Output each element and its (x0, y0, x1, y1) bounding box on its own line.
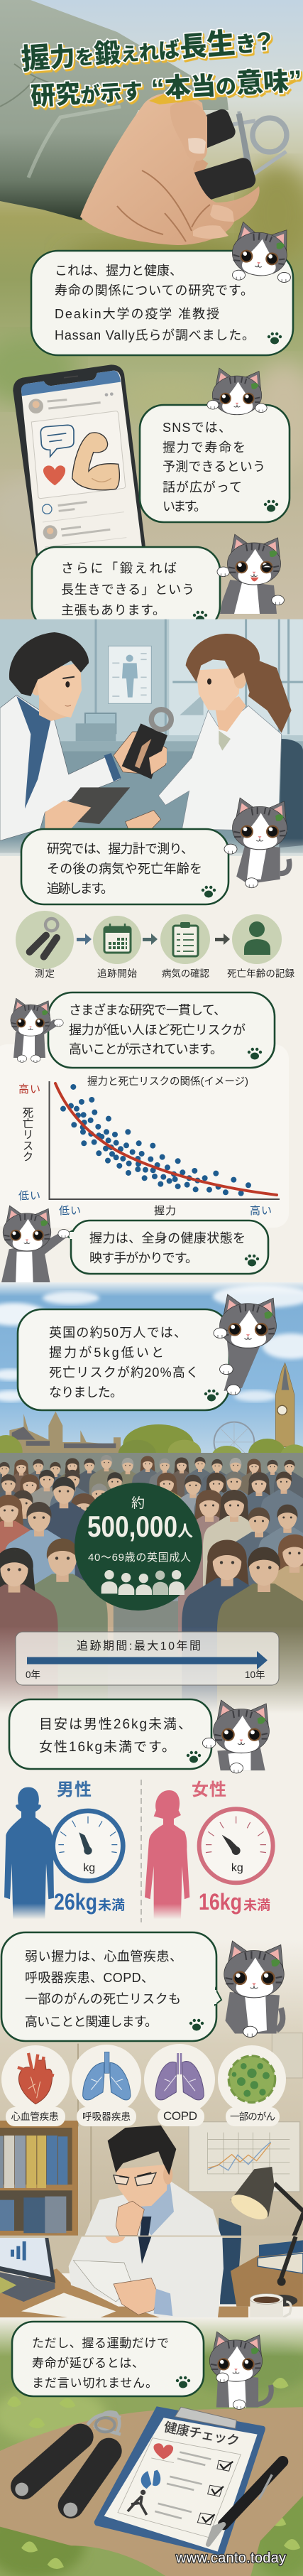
icon: paw (187, 1751, 201, 1763)
chart title: 握力と死亡リスクの関係(イメージ) (87, 1076, 248, 1088)
text block: 追跡します。 (47, 882, 114, 896)
text block: 高いことが示されています。 (69, 1042, 223, 1056)
panel: cream comparison section (0, 1714, 303, 1984)
text block: 映す手がかりです。 (89, 1251, 198, 1265)
badge: respiratory disease: 呼吸器疾患 (82, 2111, 131, 2122)
illustration: thinking male researcher at desk (0, 2126, 303, 2328)
callout: SNS claim (140, 405, 290, 522)
badge: respiratory disease (72, 2045, 141, 2126)
step: measurement (16, 911, 74, 979)
text: adults aged 40 to 69: 40〜69歳の英国成人 (88, 1551, 191, 1564)
text block: ただし、握る運動だけで (32, 2337, 169, 2350)
callout: thresholds (9, 1699, 211, 1769)
text block (39, 1716, 192, 1755)
icon: paw (202, 886, 216, 898)
value suffix: 未満 (243, 1898, 270, 1913)
icon: paw (248, 1048, 262, 1060)
icon: gauge showing under 16kg: kg (231, 1862, 243, 1874)
value: 26kg or less: 26kg (54, 1889, 97, 1915)
x axis labels: 握力 (154, 1205, 176, 1217)
text block: 目安は男性26kg未満、 (39, 1716, 192, 1732)
stat: 500,000 people: 500,000 (87, 1510, 177, 1543)
icon: female silhouette (145, 1790, 189, 1920)
trend curve (55, 1083, 277, 1195)
text block: 握力で寿命を (162, 440, 246, 455)
icon: gauge showing under 16kg (199, 1809, 273, 1883)
text block (162, 421, 265, 514)
title line 2: 研究が示す “本当の意味” (30, 65, 303, 112)
text block: その後の病気や死亡年齢を (47, 862, 202, 876)
title (20, 25, 303, 112)
text block (32, 2337, 169, 2390)
website credit: www.canto.today (175, 2550, 286, 2566)
badge: about 500,000 UK adults (75, 1483, 202, 1611)
text block: Hassan Vally氏らが調べました。 (55, 328, 255, 342)
badge: cardiovascular disease (1, 2045, 70, 2126)
icon: paw (176, 2376, 190, 2388)
icon: sad sitting cat (224, 1941, 284, 2037)
y axis labels (18, 1083, 40, 1202)
text block: さまざまな研究で一貫して、 (69, 1002, 226, 1017)
step: disease check (160, 914, 210, 979)
arrow (77, 933, 92, 945)
text block (49, 1326, 199, 1400)
callout: whole body health indicator (65, 1221, 268, 1274)
icon: waving cat (217, 534, 284, 614)
step: age at death record: 死亡年齢の記録 (227, 968, 295, 979)
chart: grip strength vs mortality risk scatter (18, 1076, 280, 1217)
timeline heading: 追跡期間:最大10年間 (77, 1640, 201, 1652)
text block: 一部のがんの死亡リスクも (25, 1992, 181, 2006)
text block: 予測できるという (162, 460, 265, 474)
text block: 弱い握力は、心血管疾患、 (25, 1949, 182, 1964)
text block: 女性16kg未満です。 (39, 1739, 175, 1755)
text block: 長生きできる」という (61, 583, 194, 597)
badge: some cancers: 一部のがん (230, 2111, 275, 2122)
x axis labels: 高い (250, 1205, 272, 1217)
badge: COPD (144, 2044, 215, 2126)
icon: male silhouette (4, 1787, 54, 1920)
badge: COPD: COPD (163, 2109, 197, 2123)
icon: paw (245, 1255, 259, 1266)
icon: sitting cat (224, 798, 290, 888)
timeline: follow-up period up to 10 years (16, 1632, 279, 1685)
illustration: jacket sleeve (0, 0, 228, 220)
illustration: clipboard health checklist (94, 2406, 265, 2556)
arrow (215, 933, 230, 945)
illustration: crowd of people (0, 1455, 303, 1705)
illustration: female researcher (126, 634, 292, 834)
text block: 話が広がって (162, 480, 242, 494)
icon: cat beside callout (214, 1294, 276, 1395)
y axis labels: 高い (18, 1083, 40, 1095)
background fade: researchers scene to cream (0, 838, 303, 867)
axes (50, 1081, 280, 1199)
value: 16kg or less: 16kg (199, 1889, 242, 1915)
icon: group of people (101, 1570, 184, 1595)
x axis labels: 低い (59, 1205, 81, 1217)
badge: cardiovascular disease: 心血管疾患 (11, 2111, 58, 2122)
title line 1: 握力を鍛えれば長生き? (20, 25, 273, 75)
text block: SNSでは、 (162, 421, 231, 435)
text block: さらに「鍛えれば (61, 561, 177, 575)
text block: 握力は、全身の健康状態を (89, 1231, 246, 1245)
value suffix: 未満 (98, 1898, 125, 1913)
callout: train and live longer claim (32, 547, 220, 630)
callout: caveat (12, 2322, 204, 2396)
callout: measurement method (21, 829, 228, 904)
icon: pointing cat (11, 998, 63, 1062)
text block: これは、握力と健康、 (55, 264, 182, 278)
icon: paw (193, 611, 207, 622)
panel: female threshold (145, 1780, 273, 1920)
text block: 寿命の関係についての研究です。 (55, 283, 253, 298)
illustration: smartphone showing social media post (13, 364, 145, 570)
text block: 英国の約50万人では、 (49, 1326, 187, 1340)
text block: 握力が低い人ほど死亡リスクが (69, 1023, 246, 1037)
text block: 主張もあります。 (61, 603, 165, 617)
step: start of follow-up: 追跡開始 (97, 968, 138, 979)
illustration: bookshelf with binders (0, 2121, 78, 2238)
callout: 500,000 UK people finding (18, 1309, 229, 1410)
callout: consistent research findings (48, 992, 275, 1068)
illustration: whiteboard line chart (189, 2122, 300, 2192)
text block: います。 (162, 499, 206, 514)
icon: paw (189, 2019, 204, 2030)
flow diagram: study procedure (16, 911, 295, 979)
decoration: yellow brush underline (149, 80, 299, 104)
text block (69, 1002, 246, 1056)
x axis labels (59, 1205, 272, 1217)
icon: cat peeking over SNS callout (207, 368, 267, 415)
arrow (27, 1651, 268, 1669)
text block: 呼吸器疾患、COPD、 (25, 1971, 154, 1985)
step: age at death record (227, 914, 295, 979)
step: disease check: 病気の確認 (162, 968, 210, 979)
heading: male: 男性 (57, 1780, 92, 1800)
illustration: wooden table (0, 2407, 303, 2576)
icon: paw (204, 1390, 219, 1401)
text block: 研究では、握力計で測り、 (47, 842, 194, 856)
clipboard heading: 健康チェック (162, 2419, 241, 2449)
text block (47, 842, 202, 896)
text block: 死亡リスクが約20%高く (49, 1365, 199, 1380)
icon: gauge showing under 26kg (53, 1811, 123, 1881)
illustration: hand gripping a hand gripper (80, 93, 287, 245)
panel: office background (0, 1939, 303, 2240)
step: start of follow-up (93, 916, 141, 979)
illustration: pen (208, 2462, 282, 2545)
icon: cat at bottom of chart callout pointing (1, 1206, 70, 1282)
text block (25, 1949, 182, 2029)
background fade: crowd to cream (0, 1627, 303, 1714)
arrow (143, 933, 158, 945)
text block: 握力が5kg低いと (49, 1346, 164, 1360)
label: end: 10年 (245, 1669, 265, 1680)
text block: Deakin大学の疫学 准教授 (55, 307, 219, 321)
divider line between male and female (141, 1780, 142, 1922)
icon: cat beside thresholds callout (202, 1700, 269, 1773)
panel: male threshold (4, 1780, 125, 1920)
y axis labels: 低い (18, 1190, 40, 1202)
text block: 高いことと関連します。 (25, 2015, 158, 2029)
text block (55, 264, 255, 342)
panel: garden background (0, 2317, 303, 2576)
stat unit: 人 (177, 1522, 193, 1540)
illustration: male researcher (0, 632, 171, 840)
step: measurement: 測定 (35, 968, 55, 979)
scatter points (60, 1084, 251, 1196)
text block (61, 561, 194, 617)
icon: worried cat (209, 2332, 271, 2409)
icon: paw (268, 332, 282, 344)
text block (89, 1231, 246, 1265)
icon: cat peeking over callout (230, 221, 290, 282)
label: start: 0年 (26, 1669, 40, 1680)
y axis labels: 死亡リスク (21, 1107, 33, 1162)
text block: 寿命が延びるとは、 (32, 2356, 144, 2370)
icon: paw (264, 500, 278, 512)
tone overlay for crowd (0, 1453, 303, 1627)
badge: some cancers (218, 2045, 286, 2126)
callout: research intro (31, 251, 293, 355)
illustration: hand gripper on table (15, 2412, 121, 2517)
text block: なりました。 (49, 1385, 123, 1400)
panel: London crowd background (0, 1282, 303, 1723)
text: about: 約 (131, 1495, 145, 1511)
panel: researchers scene (0, 619, 303, 856)
icon: gauge showing under 26kg: kg (83, 1862, 95, 1874)
disease icons row (1, 2044, 286, 2126)
callout: related diseases (1, 1932, 221, 2041)
panel: hero photo background (0, 0, 303, 620)
illustration: desk lamp (228, 2167, 303, 2238)
heading: female: 女性 (192, 1780, 226, 1800)
text block: まだ言い切れません。 (32, 2376, 158, 2390)
panel: cream lower section (0, 867, 303, 1286)
